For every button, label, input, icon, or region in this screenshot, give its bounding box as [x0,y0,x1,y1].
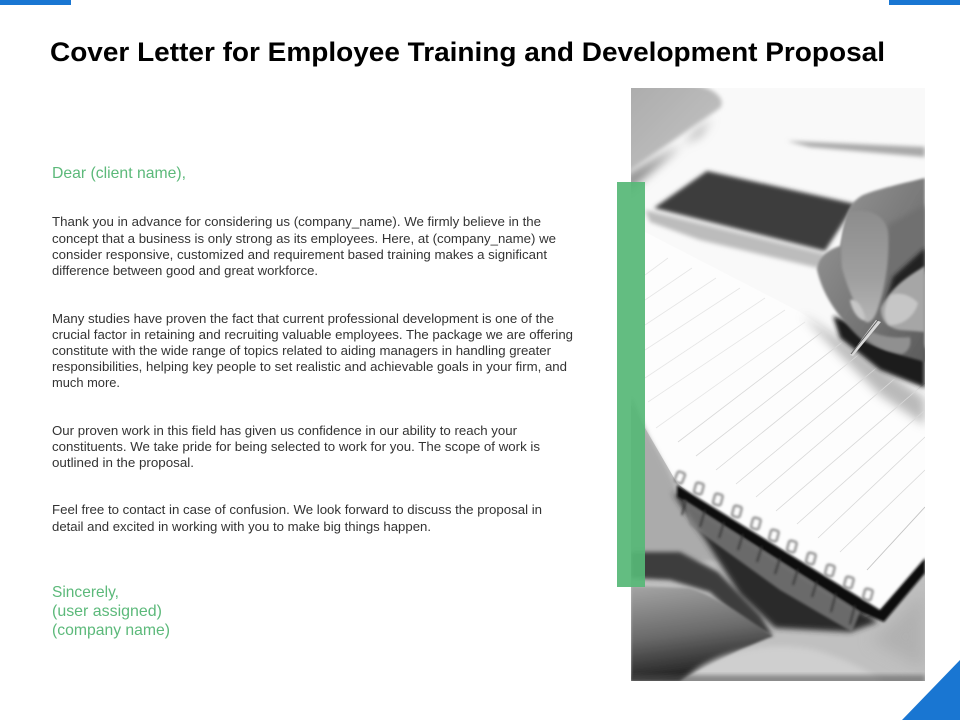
blurred pen [787,141,925,157]
signature block: (user assigned) [52,603,162,620]
greeting: Dear (client name), [52,165,186,182]
paragraph 3: constituents. We take pride for being selected to work for you. The scope of work is [52,440,540,454]
signature block [52,584,170,639]
notebook page [645,258,925,570]
title: Cover Letter for Employee Training and Development Proposal [50,37,885,67]
paragraph 2: Many studies have proven the fact that current professional development is one of the [52,312,554,326]
paragraph 3 [52,424,540,470]
blurred tablet [631,88,724,186]
signature block: Sincerely, [52,584,119,601]
paragraph 1: difference between good and great workforce. [52,264,318,278]
top left accent bar [0,0,71,5]
lap and arm below the notebook [631,422,925,681]
paragraph 1: consider responsive, customized and requirement based training makes a significant [52,248,547,262]
paragraph 3: Our proven work in this field has given us confidence in our ability to reach your [52,424,518,438]
phone [645,171,855,268]
paragraph 2: constitute with the wide range of topics related to aiding managers in handling greater [52,344,552,358]
paragraph 2: responsibilities, helping key people to set realistic and achievable goals in your firm, and [52,360,567,374]
signature block: (company name) [52,622,170,639]
paragraph 3: outlined in the proposal. [52,456,194,470]
paragraph 2: much more. [52,376,120,390]
paragraph 1 [52,215,556,278]
paragraph 2: crucial factor in retaining and recruiting valuable employees. The package we are offering [52,328,573,342]
photo: hand writing in a notebook [615,70,925,685]
corner triangle [902,660,960,720]
paragraph 4 [52,503,542,534]
green vertical bar [617,182,645,587]
paragraph 1: Thank you in advance for considering us (company_name). We firmly believe in the [52,215,541,229]
paragraph 4: Feel free to contact in case of confusion. We look forward to discuss the proposal in [52,503,542,517]
notebook edge and spiral binding [674,471,925,632]
paragraph 1: concept that a business is only strong as its employees. Here, at (company_name) we [52,232,556,246]
paragraph 4: detail and excited in working with you to make big things happen. [52,520,431,534]
hand holding the pen [817,178,925,388]
paragraph 2 [52,312,573,390]
top right accent bar [889,0,960,5]
